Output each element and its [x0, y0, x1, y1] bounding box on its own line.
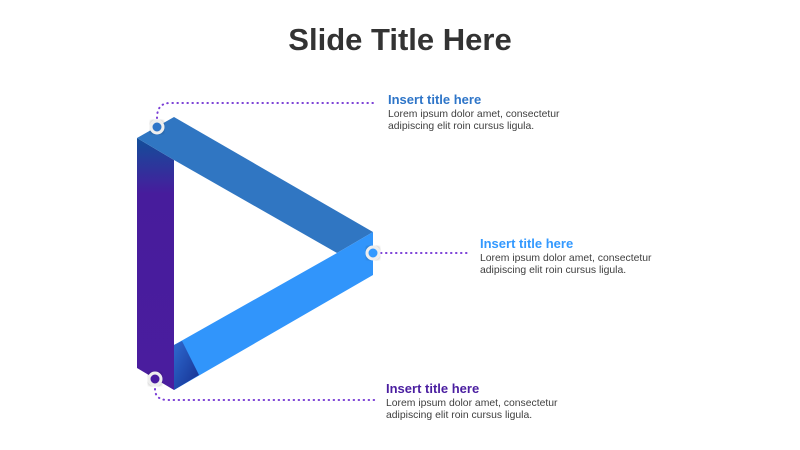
marker: bottom: [149, 373, 161, 385]
left band: [137, 138, 174, 390]
text block: top: Insert title here: [388, 92, 481, 107]
marker: mid: [367, 247, 379, 259]
text block: middle: [480, 236, 652, 276]
text block: top: adipiscing elit roin cursus ligula.: [388, 121, 534, 132]
text block: top: [388, 92, 560, 132]
marker: top: [151, 121, 163, 133]
text block: bottom: adipiscing elit roin cursus ligula.: [386, 410, 532, 421]
text block: top: Lorem ipsum dolor amet, consectetur: [388, 109, 560, 120]
text block: middle: adipiscing elit roin cursus ligula.: [480, 265, 626, 276]
top band: [137, 117, 373, 253]
text block: middle: Lorem ipsum dolor amet, consectetur: [480, 253, 652, 264]
text block: bottom: [386, 381, 558, 421]
text block: bottom: Lorem ipsum dolor amet, consectetur: [386, 398, 558, 409]
connector lines: [155, 103, 468, 400]
text block: middle: Insert title here: [480, 236, 573, 251]
text block: bottom: Insert title here: [386, 381, 479, 396]
bottom band: [174, 232, 373, 390]
title: Slide Title Here: [288, 22, 512, 57]
